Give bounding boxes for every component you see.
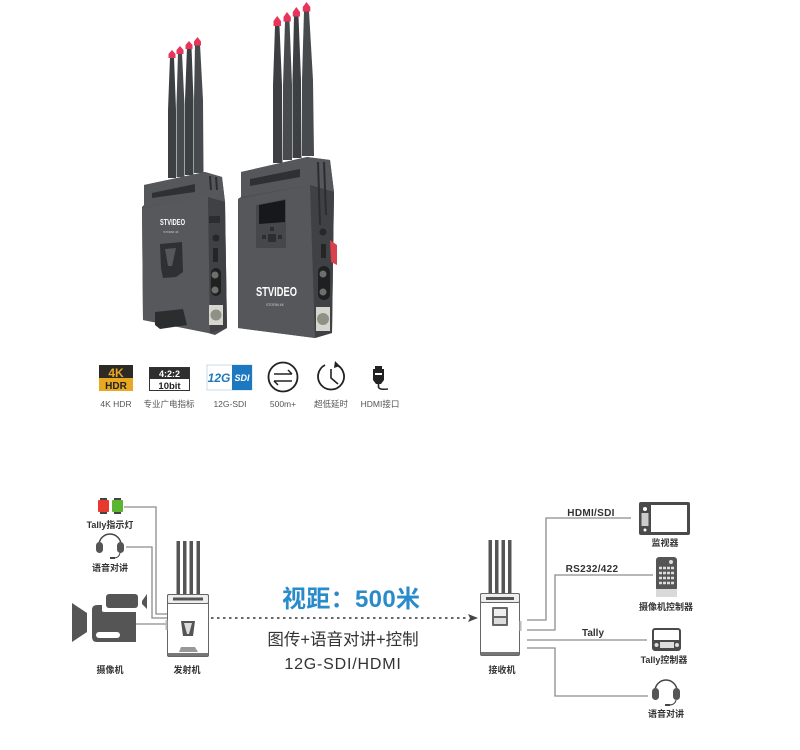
icon: headset right xyxy=(652,680,680,706)
icon: 4:2:2 10bit: 10bit xyxy=(158,381,181,392)
label: camera: 摄像机 xyxy=(96,664,124,675)
product photo: transmitter unit xyxy=(238,2,337,338)
label: camera controller: 摄像机控制器 xyxy=(639,601,693,612)
icon: HDMI plug xyxy=(373,366,388,389)
transmitter antennas xyxy=(273,2,314,163)
icon: 4:2:2 10bit: 4:2:2 xyxy=(159,369,180,379)
icon: 4:2:2 10bit xyxy=(150,368,190,392)
heading: range: 视距：500米 xyxy=(282,586,420,613)
icon: 4K HDR xyxy=(99,365,133,392)
icon: range arrows xyxy=(268,362,298,392)
receiver logo: STVIDEO xyxy=(160,218,185,227)
icon: tally controller xyxy=(653,629,680,650)
label: receiver: 接收机 xyxy=(488,664,516,675)
label: broadcast spec: 专业广电指标 xyxy=(143,399,195,409)
icon: 12G-SDI: SDI xyxy=(234,373,250,383)
icon: 12G-SDI xyxy=(207,365,252,390)
icon: remote controller xyxy=(656,557,677,597)
icon: monitor xyxy=(639,502,690,535)
label: intercom right: 语音对讲 xyxy=(648,708,684,719)
icon: 4K HDR: 4K xyxy=(108,366,124,380)
icon: headset left xyxy=(96,534,124,559)
label: HDMI port: HDMI接口 xyxy=(361,399,399,409)
connection lines: transmitter inputs xyxy=(124,507,167,624)
receiver housing xyxy=(142,172,227,335)
label: intercom left: 语音对讲 xyxy=(92,562,128,573)
icon: 4K HDR: HDR xyxy=(105,381,128,392)
connection diagram xyxy=(72,498,693,719)
icon: 12G-SDI: 12G xyxy=(208,371,230,385)
label: 4K HDR: 4K HDR xyxy=(100,399,132,409)
transmitter model text: STORM 4K xyxy=(266,303,285,307)
receiver antennas xyxy=(168,37,204,178)
receiver model text: STORM 4K xyxy=(163,230,179,234)
icon: video camera xyxy=(72,594,147,642)
label: low latency: 超低延时 xyxy=(314,399,348,409)
label: RS232/422: RS232/422 xyxy=(566,564,619,575)
label: tally light: Tally指示灯 xyxy=(87,519,133,530)
label: 500m+: 500m+ xyxy=(270,399,296,409)
icon: low latency clock xyxy=(318,361,344,390)
icon: tally lights xyxy=(98,498,123,514)
label: 12G-SDI: 12G-SDI xyxy=(213,399,247,409)
label: transmitter: 发射机 xyxy=(173,664,201,675)
label: HDMI/SDI: HDMI/SDI xyxy=(567,508,615,519)
text: interface types: 12G-SDI/HDMI xyxy=(284,656,402,673)
transmitter logo: STVIDEO xyxy=(256,284,297,299)
transmitter antennas xyxy=(176,541,200,594)
transmitter device xyxy=(166,541,208,656)
product photo: receiver unit xyxy=(142,37,227,335)
transmitter housing xyxy=(238,157,337,338)
text: signal types: 图传+语音对讲+控制 xyxy=(267,630,419,649)
feature icons row xyxy=(99,361,399,409)
label: tally controller: Tally控制器 xyxy=(641,654,687,665)
label: Tally: Tally xyxy=(582,628,604,639)
connection lines: receiver outputs xyxy=(527,518,653,696)
label: monitor: 监视器 xyxy=(651,537,679,548)
dotted arrow xyxy=(211,614,478,622)
receiver antennas xyxy=(488,540,512,593)
receiver device xyxy=(480,540,522,656)
